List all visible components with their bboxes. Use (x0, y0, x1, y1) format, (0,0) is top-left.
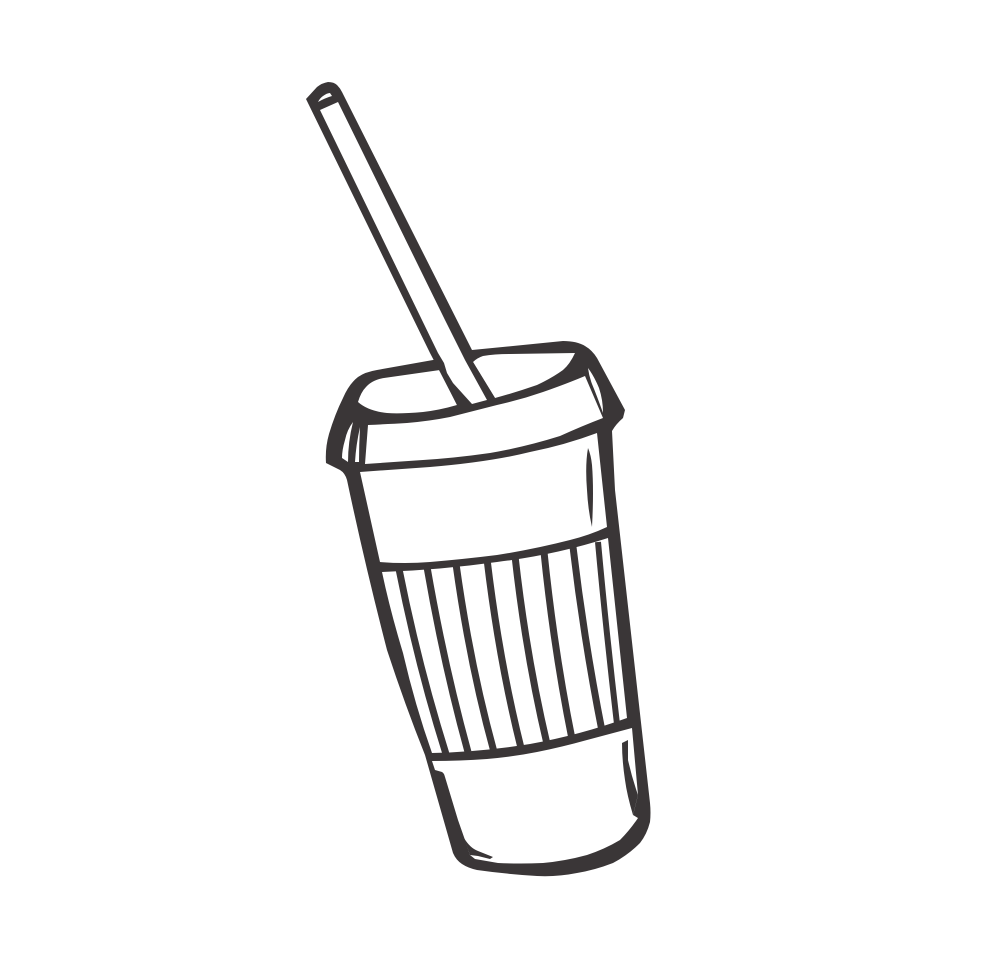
sleeve panel (382, 538, 627, 753)
straw outline (306, 82, 495, 408)
straw opening (318, 93, 332, 102)
sleeve ribs (399, 542, 617, 754)
lid highlight: left outer (342, 422, 353, 462)
lid highlight: right (588, 368, 603, 413)
cup silhouette (326, 341, 650, 876)
upper cup panel (360, 433, 607, 563)
lid opening: left of straw (358, 370, 457, 413)
lid highlight: left inner (355, 427, 360, 462)
cup base highlight: left (464, 838, 493, 859)
ribbed sleeve (382, 538, 627, 754)
cup base panel (432, 728, 638, 864)
lid band (365, 376, 603, 464)
lid opening: right of straw (473, 353, 575, 398)
straw body (320, 102, 487, 404)
icon: drinking straw (306, 82, 495, 408)
cup highlight: upper right (586, 448, 593, 527)
cup base highlight: right (622, 740, 638, 815)
